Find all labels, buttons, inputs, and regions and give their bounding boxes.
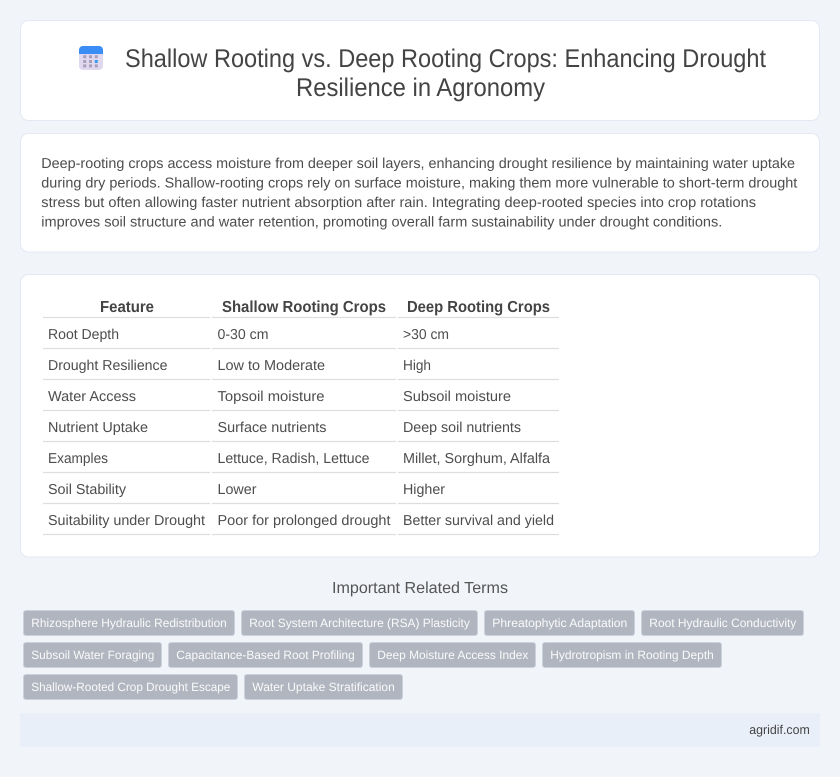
table row: root depth: Root Depth (48, 327, 119, 343)
tag: capacitance-based root profiling (168, 642, 362, 668)
tag: water uptake stratification (244, 674, 402, 700)
panel: header (20, 20, 820, 120)
tag: phreatophytic adaptation (484, 610, 634, 636)
table row: soil stability: Lower (218, 482, 257, 498)
table row: nutrient uptake: Nutrient Uptake (48, 420, 148, 436)
table row: nutrient uptake: Deep soil nutrients (403, 420, 521, 436)
table row: soil stability (48, 482, 445, 498)
tag: capacitance-based root profiling: Capacitance-Based Root Profiling (176, 648, 355, 662)
table row: water access: Subsoil moisture (403, 389, 511, 405)
tag: rhizosphere hydraulic redistribution: Rhizosphere Hydraulic Redistribution (31, 616, 227, 630)
tag: subsoil water foraging (24, 642, 162, 668)
text block: introduction paragraph: stress but often allowing faster nutrient absorption after rain. Integrating deep-rooted species into crop rotations (41, 195, 756, 211)
panel: introduction (20, 134, 820, 252)
table header row (100, 299, 550, 316)
text block: introduction paragraph: improves soil structure and water retention, promoting overall farm sustainability under drought conditions. (41, 214, 722, 230)
table row: drought resilience: Low to Moderate (218, 358, 325, 374)
table row: suitability under drought: Better survival and yield (403, 513, 554, 529)
table row: root depth: 0-30 cm (218, 327, 269, 343)
tag: shallow-rooted crop drought escape: Shallow-Rooted Crop Drought Escape (31, 680, 231, 694)
table header row: Deep Rooting Crops (407, 299, 550, 316)
tag: deep moisture access index: Deep Moisture Access Index (377, 648, 528, 662)
tag: shallow-rooted crop drought escape (24, 674, 238, 700)
table header row: Feature (100, 299, 154, 316)
title: Shallow Rooting vs. Deep Rooting Crops: Enhancing Drought (125, 45, 766, 73)
tag: root system architecture (242, 610, 478, 636)
table row: water access: Water Access (48, 389, 136, 405)
table row: drought resilience: Drought Resilience (48, 358, 168, 374)
tag: deep moisture access index (370, 642, 536, 668)
table row: drought resilience (48, 358, 431, 374)
tag: root hydraulic conductivity (642, 610, 804, 636)
text block: introduction paragraph: during dry periods. Shallow-rooting crops rely on surface moisture, making them more vulnerable to short-term drought (41, 176, 797, 192)
tag: root system architecture: Root System Architecture (RSA) Plasticity (249, 616, 470, 630)
table row: root depth: >30 cm (403, 327, 449, 343)
table row: water access (48, 389, 511, 405)
table row: suitability under drought: Poor for prolonged drought (218, 513, 390, 529)
heading: important related terms: Important Related Terms (332, 580, 508, 597)
table header row: Shallow Rooting Crops (222, 299, 386, 316)
table row: suitability under drought: Suitability under Drought (48, 513, 205, 529)
tag: hydrotropism in rooting depth: Hydrotropism in Rooting Depth (550, 648, 714, 662)
table row: nutrient uptake (48, 420, 521, 436)
footer: agridif.com (749, 722, 810, 737)
title: Resilience in Agronomy (296, 74, 545, 102)
tag: subsoil water foraging: Subsoil Water Foraging (31, 648, 154, 662)
tag: water uptake stratification: Water Uptake Stratification (252, 680, 395, 694)
table row: suitability under drought (48, 513, 554, 529)
table row: water access: Topsoil moisture (218, 389, 324, 405)
tags: related terms (24, 610, 804, 700)
tag: root hydraulic conductivity: Root Hydraulic Conductivity (649, 616, 796, 630)
footer (20, 713, 820, 747)
table row: drought resilience: High (403, 358, 431, 374)
table row: nutrient uptake: Surface nutrients (218, 420, 326, 436)
table row: soil stability: Higher (403, 482, 445, 498)
table row: soil stability: Soil Stability (48, 482, 127, 498)
tag: rhizosphere hydraulic redistribution (24, 610, 234, 636)
panel: comparison table (20, 274, 820, 557)
text block: introduction paragraph: Deep-rooting crops access moisture from deeper soil layers, enhancing drought resilience by maintaining water uptake (41, 156, 795, 172)
title (125, 45, 766, 102)
tag: hydrotropism in rooting depth (542, 642, 722, 668)
table row: root depth (48, 327, 449, 343)
text block: introduction paragraph (41, 156, 797, 230)
table row: examples: Examples (48, 451, 108, 467)
table row: examples: Lettuce, Radish, Lettuce (218, 451, 370, 467)
table row: examples: Millet, Sorghum, Alfalfa (403, 451, 550, 467)
tag: phreatophytic adaptation: Phreatophytic Adaptation (492, 616, 627, 630)
icon: calendar (79, 46, 103, 70)
table row: examples (48, 451, 550, 467)
